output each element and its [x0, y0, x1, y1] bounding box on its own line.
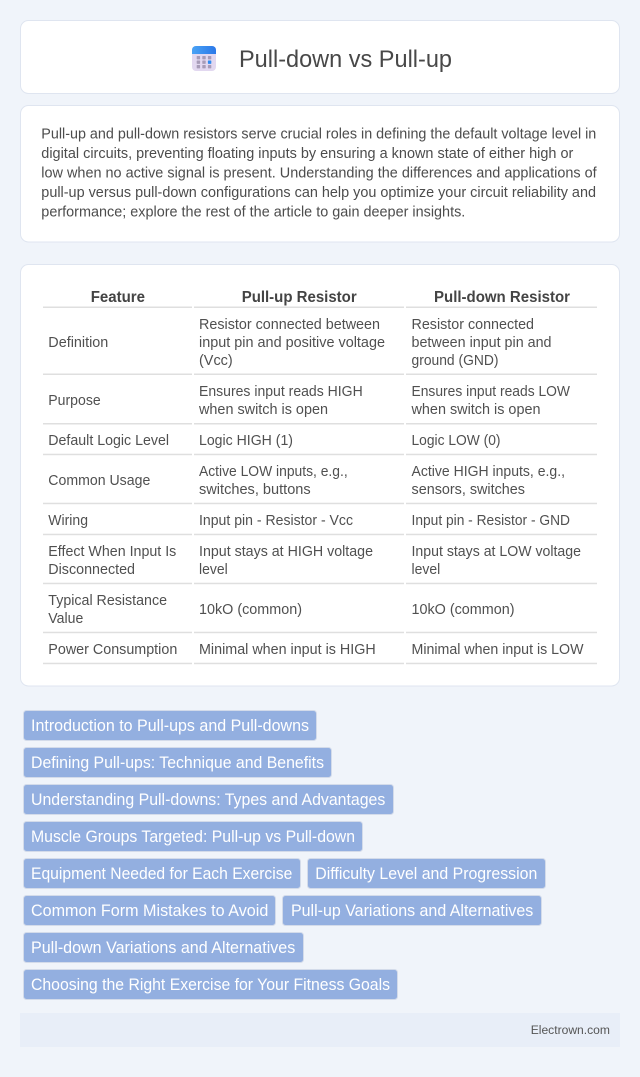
panel: page header — [20, 20, 620, 94]
row: effect when disconnected: level — [199, 562, 228, 578]
intro text block: pull-up versus pull-down configurations can help you optimize your circuit reliability and — [41, 185, 596, 201]
row: power consumption — [48, 642, 584, 658]
panel: introduction — [20, 106, 620, 242]
row: purpose: Purpose — [48, 393, 101, 409]
tag: equipment — [24, 858, 300, 888]
tag: pull-down variations: Pull-down Variations and Alternatives — [31, 939, 295, 957]
row: default logic level: Logic HIGH (1) — [199, 433, 293, 449]
row: power consumption: Minimal when input is LOW — [412, 642, 584, 658]
tag: defining pull-ups — [24, 748, 332, 778]
tag: muscle groups — [24, 822, 362, 852]
tag: form mistakes: Common Form Mistakes to Avoid — [31, 902, 268, 920]
panel: topic tags — [24, 710, 546, 1000]
tag: equipment: Equipment Needed for Each Exercise — [31, 865, 292, 883]
tag: introduction — [24, 710, 316, 740]
row: power consumption: Minimal when input is HIGH — [199, 642, 376, 658]
row: effect when disconnected: Effect When Input Is — [48, 544, 176, 560]
row: effect when disconnected: Input stays at LOW voltage — [412, 544, 581, 560]
tag: understanding pull-downs: Understanding Pull-downs: Types and Advantages — [31, 791, 385, 809]
intro text block: Pull-up and pull-down resistors serve crucial roles in defining the default voltage level in — [41, 126, 596, 142]
title: Pull-down vs Pull-up — [239, 46, 452, 73]
row: definition: Resistor connected between — [199, 317, 380, 333]
tag: pull-up variations: Pull-up Variations and Alternatives — [291, 902, 533, 920]
row: common usage — [48, 464, 565, 498]
tag: pull-up variations — [282, 896, 542, 926]
tag: introduction: Introduction to Pull-ups and Pull-downs — [31, 717, 309, 735]
row: default logic level: Default Logic Level — [48, 433, 169, 449]
icon: calendar grid — [192, 46, 216, 71]
intro text block — [41, 126, 597, 220]
row: effect when disconnected: level — [412, 562, 440, 578]
tag: understanding pull-downs — [24, 784, 394, 814]
row: definition: (Vcc) — [199, 353, 233, 369]
row: purpose — [48, 384, 570, 418]
row: wiring — [48, 513, 570, 529]
intro text block: performance; explore the rest of the article to gain deeper insights. — [41, 204, 465, 220]
tag: pull-down variations — [24, 932, 304, 962]
tag: difficulty: Difficulty Level and Progression — [315, 865, 537, 883]
row: definition: input pin and positive voltage — [199, 335, 385, 351]
tag: form mistakes — [24, 896, 276, 926]
table header row: Feature — [91, 289, 145, 306]
row: default logic level: Logic LOW (0) — [412, 433, 500, 449]
row: typical resistance: Value — [48, 611, 83, 627]
row: effect when disconnected: Input stays at HIGH voltage — [199, 544, 373, 560]
tag: difficulty — [308, 858, 546, 888]
row: effect when disconnected: Disconnected — [48, 562, 135, 578]
tag: muscle groups: Muscle Groups Targeted: Pull-up vs Pull-down — [31, 828, 355, 846]
intro text block: digital circuits, preventing floating inputs by ensuring a known state of either high or — [41, 146, 574, 162]
row: wiring: Input pin - Resistor - GND — [412, 513, 570, 529]
intro text block: low when no active signal is present. Understanding the differences and applications of — [41, 166, 597, 182]
tag: choosing exercise — [24, 970, 398, 1000]
row: common usage: switches, buttons — [199, 482, 311, 498]
row: default logic level — [48, 433, 501, 449]
row: purpose: Ensures input reads LOW — [412, 384, 570, 400]
table header row: Pull-down Resistor — [434, 289, 570, 306]
row: definition: ground (GND) — [412, 353, 498, 369]
row: definition: Resistor connected — [412, 317, 534, 333]
tag: choosing exercise: Choosing the Right Exercise for Your Fitness Goals — [31, 976, 390, 994]
table header row — [91, 289, 570, 306]
row: power consumption: Power Consumption — [48, 642, 177, 658]
row: purpose: Ensures input reads HIGH — [199, 384, 363, 400]
row: purpose: when switch is open — [198, 402, 328, 418]
row: typical resistance: 10kO (common) — [199, 602, 302, 618]
row: typical resistance: Typical Resistance — [48, 593, 167, 609]
row: purpose: when switch is open — [410, 402, 541, 418]
row: common usage: Common Usage — [48, 473, 150, 489]
row: wiring: Wiring — [48, 513, 88, 529]
row: definition — [48, 317, 552, 369]
panel: comparison table — [20, 264, 620, 686]
row: definition: between input pin and — [412, 335, 552, 351]
row: typical resistance: 10kO (common) — [412, 602, 514, 618]
footer — [20, 1013, 620, 1047]
row: common usage: Active HIGH inputs, e.g., — [412, 464, 565, 480]
row: wiring: Input pin - Resistor - Vcc — [199, 513, 353, 529]
row: typical resistance — [48, 593, 515, 627]
footer: Electrown.com — [531, 1023, 610, 1037]
row: common usage: sensors, switches — [412, 482, 525, 498]
row: common usage: Active LOW inputs, e.g., — [199, 464, 348, 480]
tag: defining pull-ups: Defining Pull-ups: Technique and Benefits — [31, 754, 324, 772]
row: definition: Definition — [48, 335, 108, 351]
table header row: Pull-up Resistor — [242, 289, 357, 306]
row: effect when disconnected — [48, 544, 581, 578]
